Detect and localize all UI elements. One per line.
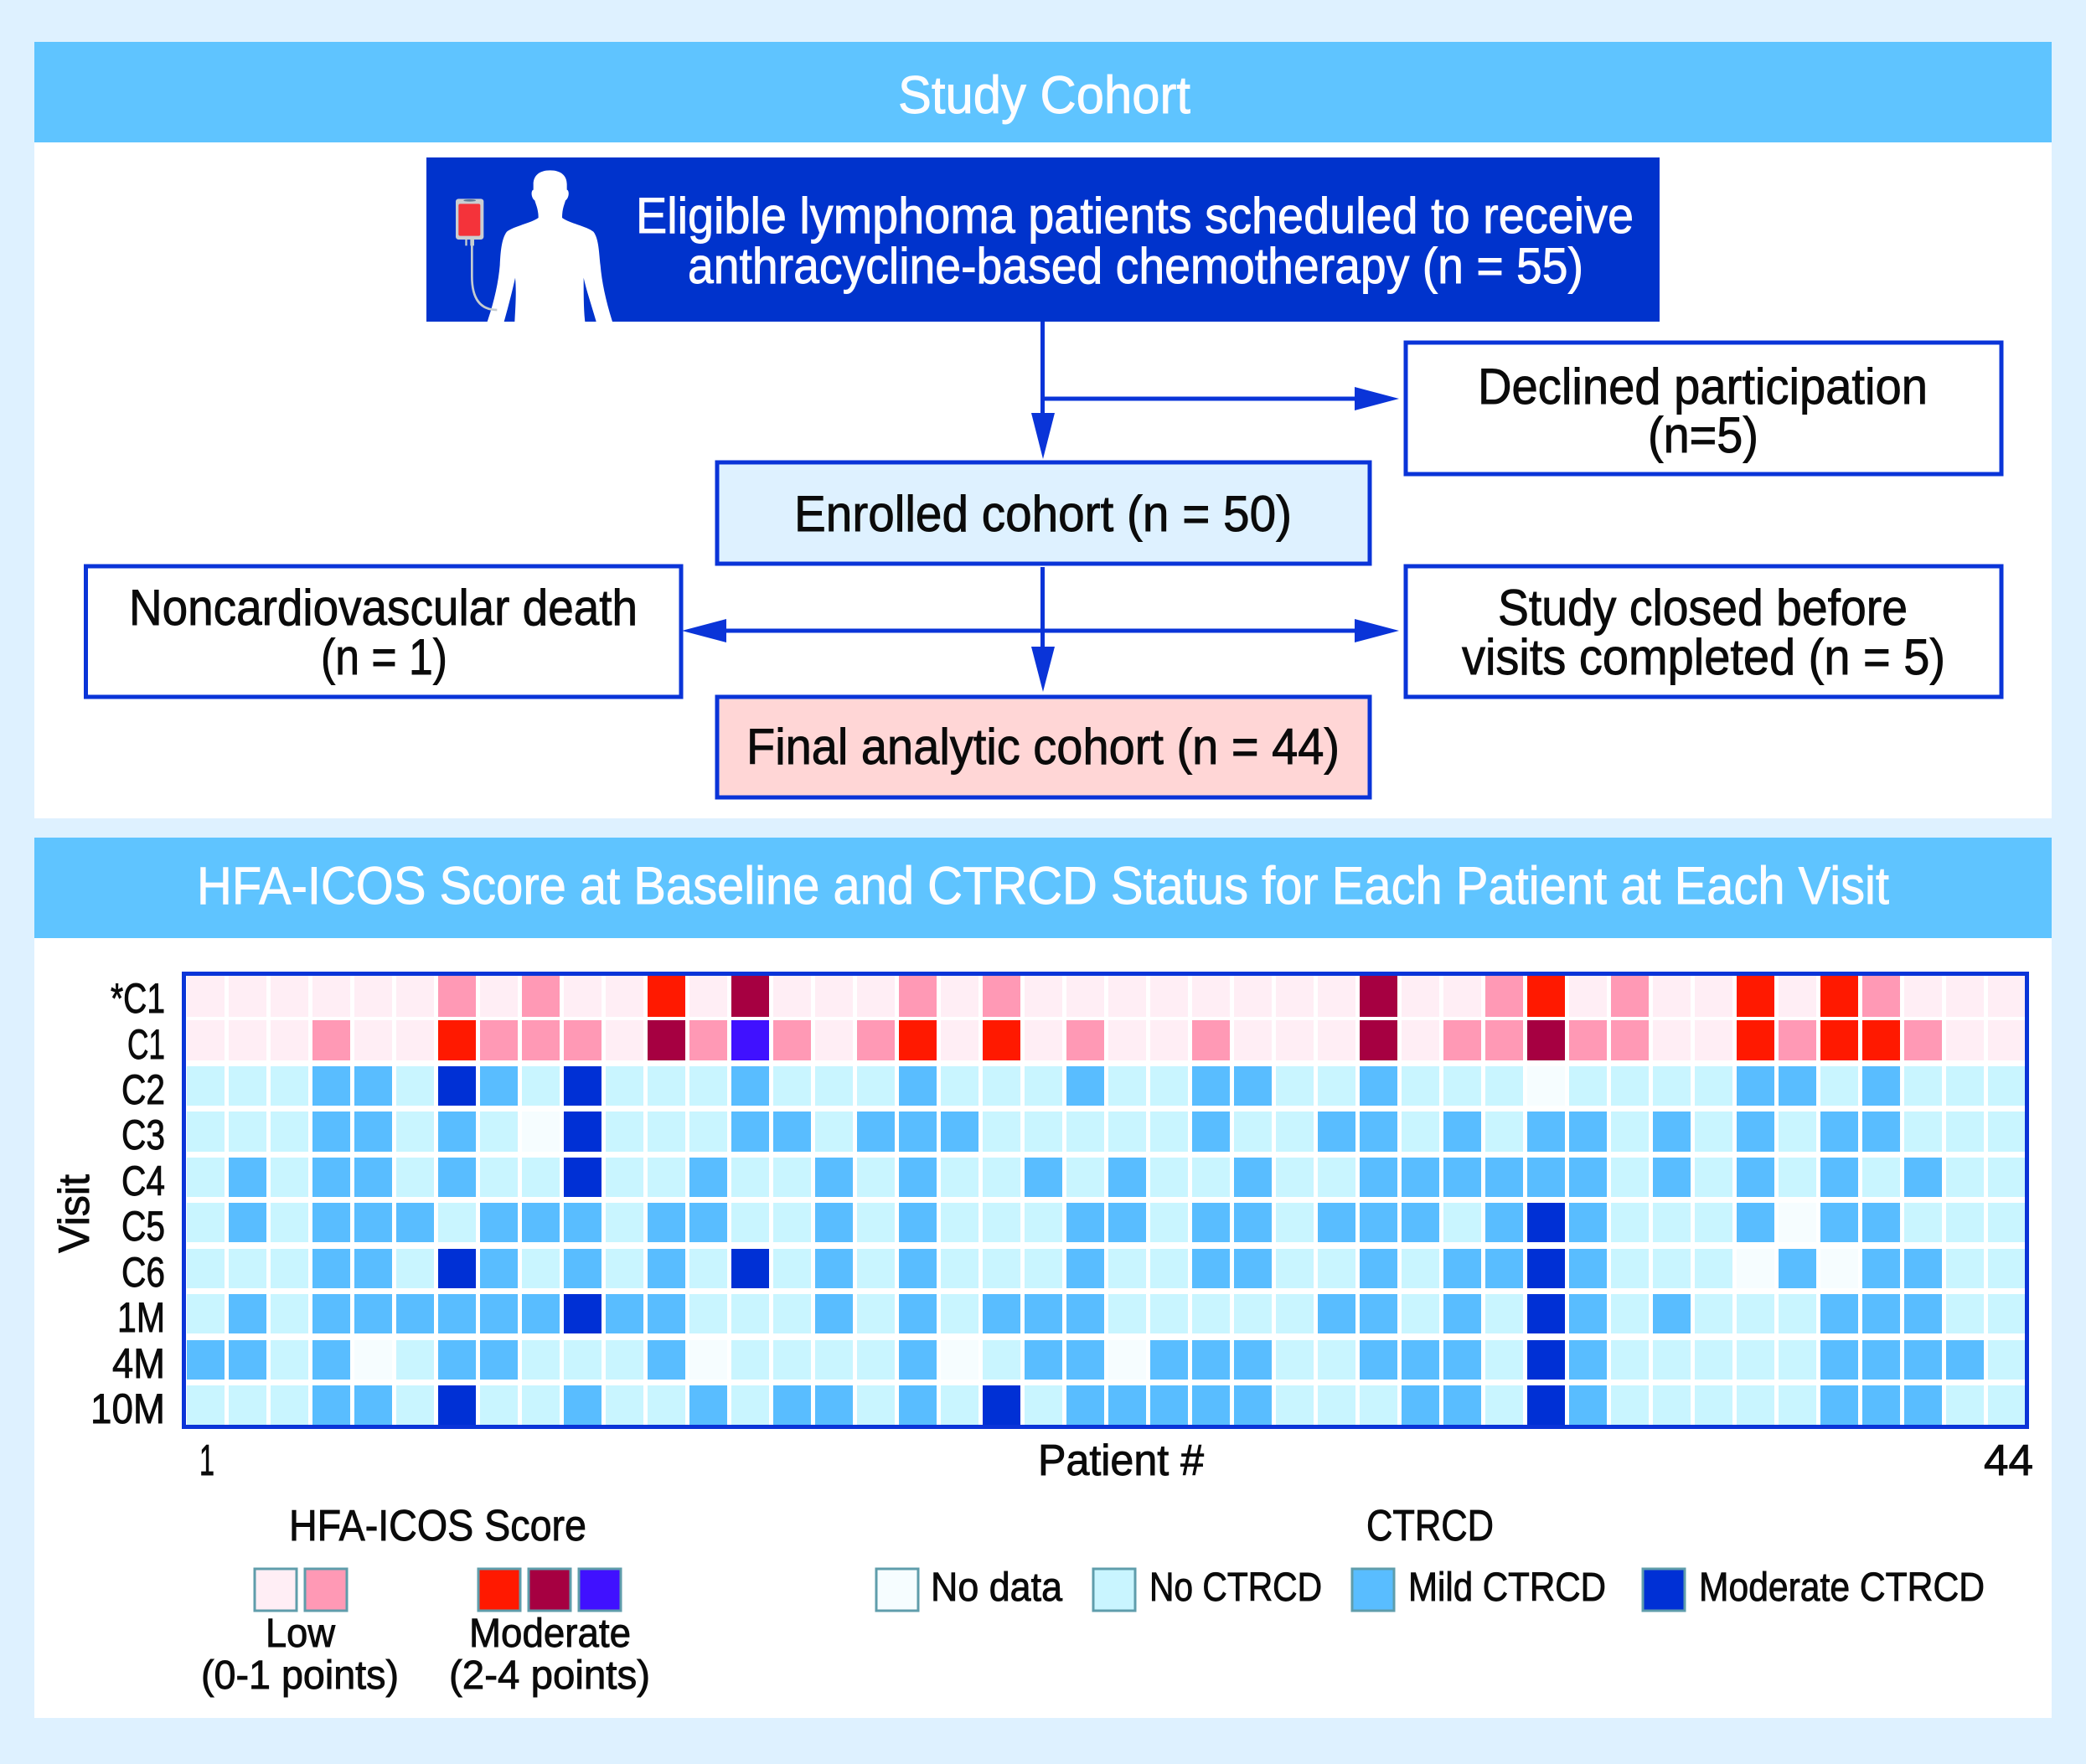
box: enrolled cohort [717,462,1370,564]
legend: HFA-ICOS score: (2-4 points) [449,1653,650,1698]
row: C4 [187,1158,2025,1197]
axis: visit labels: C6 [121,1249,165,1296]
header: study cohort: Study Cohort [898,66,1190,125]
panel: study cohort [34,42,2052,818]
box: final analytic cohort: Final analytic cohort (n = 44) [746,719,1340,775]
row: C6 [187,1249,2025,1288]
row: *C1 [187,976,2025,1017]
box: study closed [1406,566,2001,697]
row: 1M [187,1294,2025,1333]
box: noncardiovascular death: (n = 1) [321,629,447,685]
legend: HFA-ICOS score: Low [266,1612,335,1656]
legend: HFA-ICOS score: HFA-ICOS Score [289,1502,586,1550]
row: C2 [187,1066,2025,1106]
legend: CTRCD: Moderate CTRCD [1699,1565,1985,1610]
axis: visit labels [90,975,165,1432]
axis: patient number: 44 [1984,1436,2033,1485]
text: eligible patients: anthracycline-based chemotherapy (n = 55) [688,238,1583,294]
box: final analytic cohort [717,697,1370,797]
box: eligible patients [426,157,1660,322]
box: noncardiovascular death [85,566,681,697]
legend: CTRCD: Mild CTRCD [1408,1565,1606,1610]
legend: HFA-ICOS score: (0-1 points) [201,1653,399,1698]
box: study closed: visits completed (n = 5) [1462,629,1945,685]
row: 4M [187,1340,2025,1380]
row: C3 [187,1112,2025,1152]
heatmap: score and CTRCD status by patient and visit [182,972,2029,1429]
header: HFA-ICOS score: HFA-ICOS Score at Baseline and CTRCD Status for Each Patient at Each Visit [197,857,1889,916]
axis: visit labels: C2 [121,1066,165,1113]
legend: CTRCD: CTRCD [1366,1502,1494,1550]
box: noncardiovascular death: Noncardiovascular death [129,580,638,636]
legend: CTRCD: No data [931,1565,1062,1610]
header: study cohort [34,42,2052,142]
box: declined participation: Declined participation [1478,358,1928,415]
text: eligible patients [636,188,1634,294]
row: C1 [187,1020,2025,1060]
axis: visit labels: 4M [112,1340,165,1387]
axis: patient number: Patient # [1038,1436,1204,1485]
axis: patient number [199,1436,2033,1485]
text: eligible patients: Eligible lymphoma patients scheduled to receive [636,188,1634,244]
legend: HFA-ICOS score [201,1502,650,1698]
row: C5 [187,1203,2025,1242]
box: declined participation: (n=5) [1648,407,1758,463]
axis: visit labels: C3 [121,1112,165,1158]
axis: visit labels: C1 [127,1021,165,1068]
axis: visit labels: C4 [121,1158,165,1204]
axis: visit labels: 10M [90,1385,165,1432]
legend: CTRCD: No CTRCD [1149,1565,1322,1610]
axis title: visit: Visit [50,1173,99,1253]
row: 10M [187,1385,2025,1425]
header: HFA-ICOS score [34,838,2052,938]
axis: patient number: 1 [199,1436,214,1485]
axis: visit labels: C5 [121,1203,165,1250]
legend: HFA-ICOS score: Moderate [469,1612,631,1656]
box: declined participation [1406,343,2001,474]
icon: person with IV bag [456,170,612,322]
box: study closed: Study closed before [1498,580,1908,636]
arrow: eligible to enrolled with branch to declined [1031,322,1399,459]
box: enrolled cohort: Enrolled cohort (n = 50) [794,486,1292,542]
panel: HFA-ICOS heatmap section [34,838,2052,1718]
axis: visit labels: *C1 [111,975,165,1022]
arrow: enrolled to final with branches both sides [682,567,1399,692]
legend: CTRCD [876,1502,1985,1611]
axis: visit labels: 1M [117,1294,165,1341]
